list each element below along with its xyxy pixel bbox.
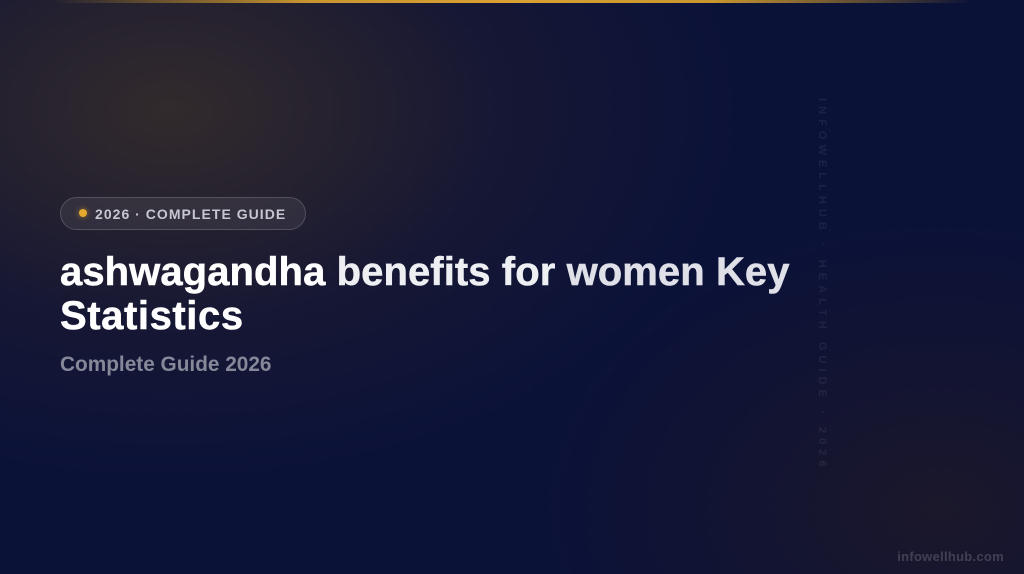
- badge text: 2026 · COMPLETE GUIDE: [95, 206, 286, 222]
- brand footer: infowellhub.com: [897, 549, 1004, 564]
- top accent bar: [51, 0, 973, 3]
- title: Statistics: [60, 294, 244, 338]
- title: [60, 250, 790, 338]
- badge: 2026 complete guide: [60, 197, 306, 230]
- title: ashwagandha benefits for women Key: [60, 250, 790, 294]
- subtitle: Complete Guide 2026: [60, 353, 272, 376]
- vertical watermark text: INFOWELLHUB · HEALTH GUIDE · 2026: [816, 98, 828, 472]
- icon: amber dot: [79, 209, 87, 217]
